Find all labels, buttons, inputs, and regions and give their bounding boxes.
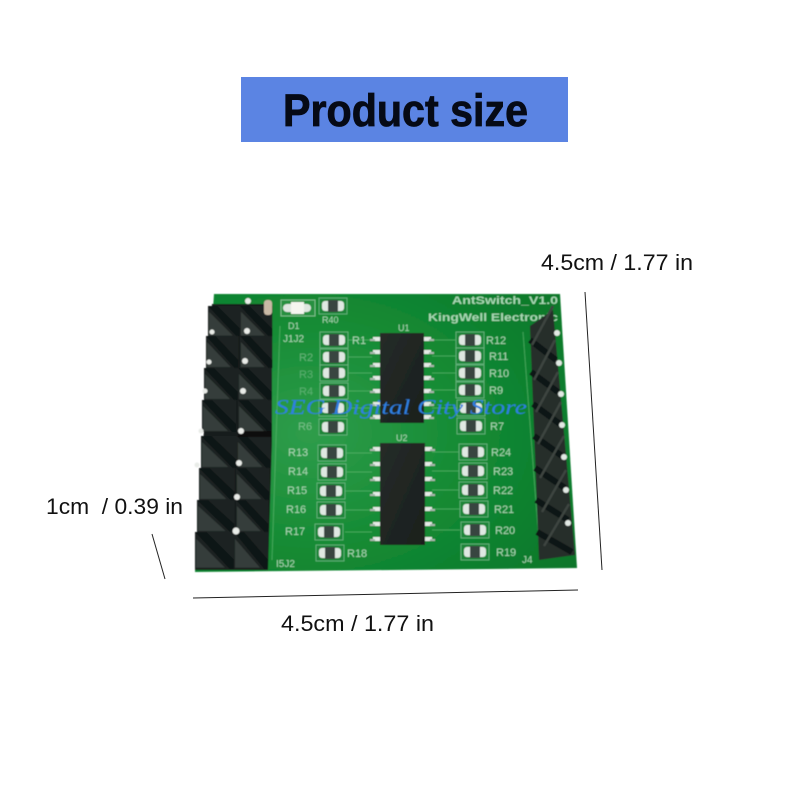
watermark: SEG Digital City Store — [275, 395, 527, 419]
board silkscreen labels: R15 — [287, 485, 307, 497]
thickness dimension label: 1cm / 0.39 in — [46, 494, 183, 519]
board silkscreen labels: R16 — [286, 504, 306, 516]
left resistors — [315, 332, 348, 561]
left header pin tips — [194, 298, 272, 534]
board silkscreen labels: R2 — [299, 352, 313, 364]
board silkscreen labels: R13 — [288, 447, 308, 459]
board silkscreen labels: R20 — [495, 525, 515, 537]
board silkscreen labels: I5J2 — [276, 559, 295, 570]
board silkscreen labels: R24 — [491, 447, 511, 459]
board silkscreen labels: KingWell Electronic — [428, 312, 558, 324]
light traces — [272, 326, 556, 560]
board silkscreen labels: J4 — [522, 555, 533, 566]
board silkscreen labels: R9 — [489, 385, 503, 397]
left pin headers — [195, 304, 272, 570]
board silkscreen labels: R21 — [494, 504, 514, 516]
right pin header — [530, 306, 575, 560]
board silkscreen labels: R19 — [496, 547, 516, 559]
title banner — [241, 77, 568, 142]
width dimension line — [193, 590, 578, 598]
thickness dimension line — [152, 534, 165, 579]
board silkscreen labels: R3 — [299, 369, 313, 381]
height dimension line — [585, 292, 602, 570]
board silkscreen labels: R18 — [347, 548, 367, 560]
board silkscreen labels: D1 — [288, 321, 300, 331]
board silkscreen labels: U2 — [396, 433, 408, 443]
board silkscreen labels: R17 — [285, 526, 305, 538]
board silkscreen labels: R12 — [486, 335, 506, 347]
circuit board photo — [194, 294, 577, 572]
board silkscreen labels: R4 — [299, 386, 313, 398]
width dimension label: 4.5cm / 1.77 in — [281, 611, 434, 636]
chip U1 — [370, 333, 434, 423]
board silkscreen labels — [276, 295, 558, 570]
board silkscreen labels: R10 — [489, 368, 509, 380]
board silkscreen labels: R6 — [298, 421, 312, 433]
board substrate — [195, 294, 577, 572]
right resistors — [456, 332, 489, 560]
board silkscreen labels: R40 — [322, 315, 339, 325]
board silkscreen labels: R22 — [493, 485, 513, 497]
board silkscreen labels: R14 — [288, 466, 308, 478]
board silkscreen labels: U1 — [398, 323, 410, 333]
board silkscreen labels: R7 — [490, 421, 504, 433]
title banner: Product size — [283, 85, 528, 136]
chip U2 — [370, 443, 435, 545]
board silkscreen labels: R11 — [489, 351, 508, 363]
board silkscreen labels: R1 — [352, 335, 366, 347]
top components D1 and R40 — [281, 298, 347, 316]
board silkscreen labels: J1J2 — [283, 334, 305, 345]
height dimension label: 4.5cm / 1.77 in — [541, 250, 693, 275]
board silkscreen labels: AntSwitch_V1.0 — [452, 295, 558, 307]
board silkscreen labels: R23 — [493, 466, 513, 478]
